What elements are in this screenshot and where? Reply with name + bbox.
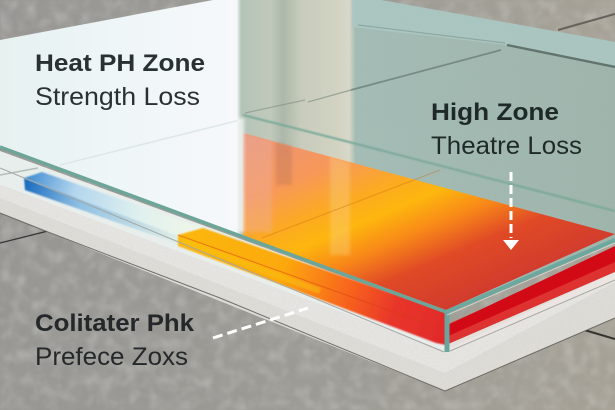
arrow: down to high zone: [503, 172, 519, 250]
frosted base under the glass: [0, 151, 446, 351]
colour plate front band: [178, 228, 446, 345]
colour plate right face: [446, 246, 615, 352]
reflection streaks over the plate: [238, 118, 350, 255]
label: Colitater Phk: Prefece Zoxs: [35, 343, 188, 371]
colour plate top: blue end: [24, 172, 203, 236]
label: Heat PH Zone: Strength Loss: [35, 83, 200, 111]
glass top surface: [0, 0, 615, 312]
label: Colitater Phk: [35, 310, 195, 371]
label: Heat PH Zone: [35, 50, 205, 111]
label: Colitater Phk: Colitater Phk: [35, 310, 195, 337]
glass back band top right: [352, 0, 615, 68]
label: High Zone: Theatre Loss: [431, 132, 582, 160]
glass reflected tile lines: [0, 25, 615, 175]
glass front edges: [0, 147, 615, 352]
label: High Zone: High Zone: [431, 99, 559, 126]
colour plate top: heat gradient: [243, 133, 615, 310]
label: High Zone: [431, 99, 582, 160]
label: Heat PH Zone: Heat PH Zone: [35, 50, 205, 77]
arrow: dashed leader to slab: [213, 308, 308, 338]
faint tile line on the coloured plate: [262, 170, 440, 238]
white slab: [0, 185, 615, 392]
glass back edge: [243, 115, 615, 211]
colour plate side: blue end: [24, 178, 178, 244]
